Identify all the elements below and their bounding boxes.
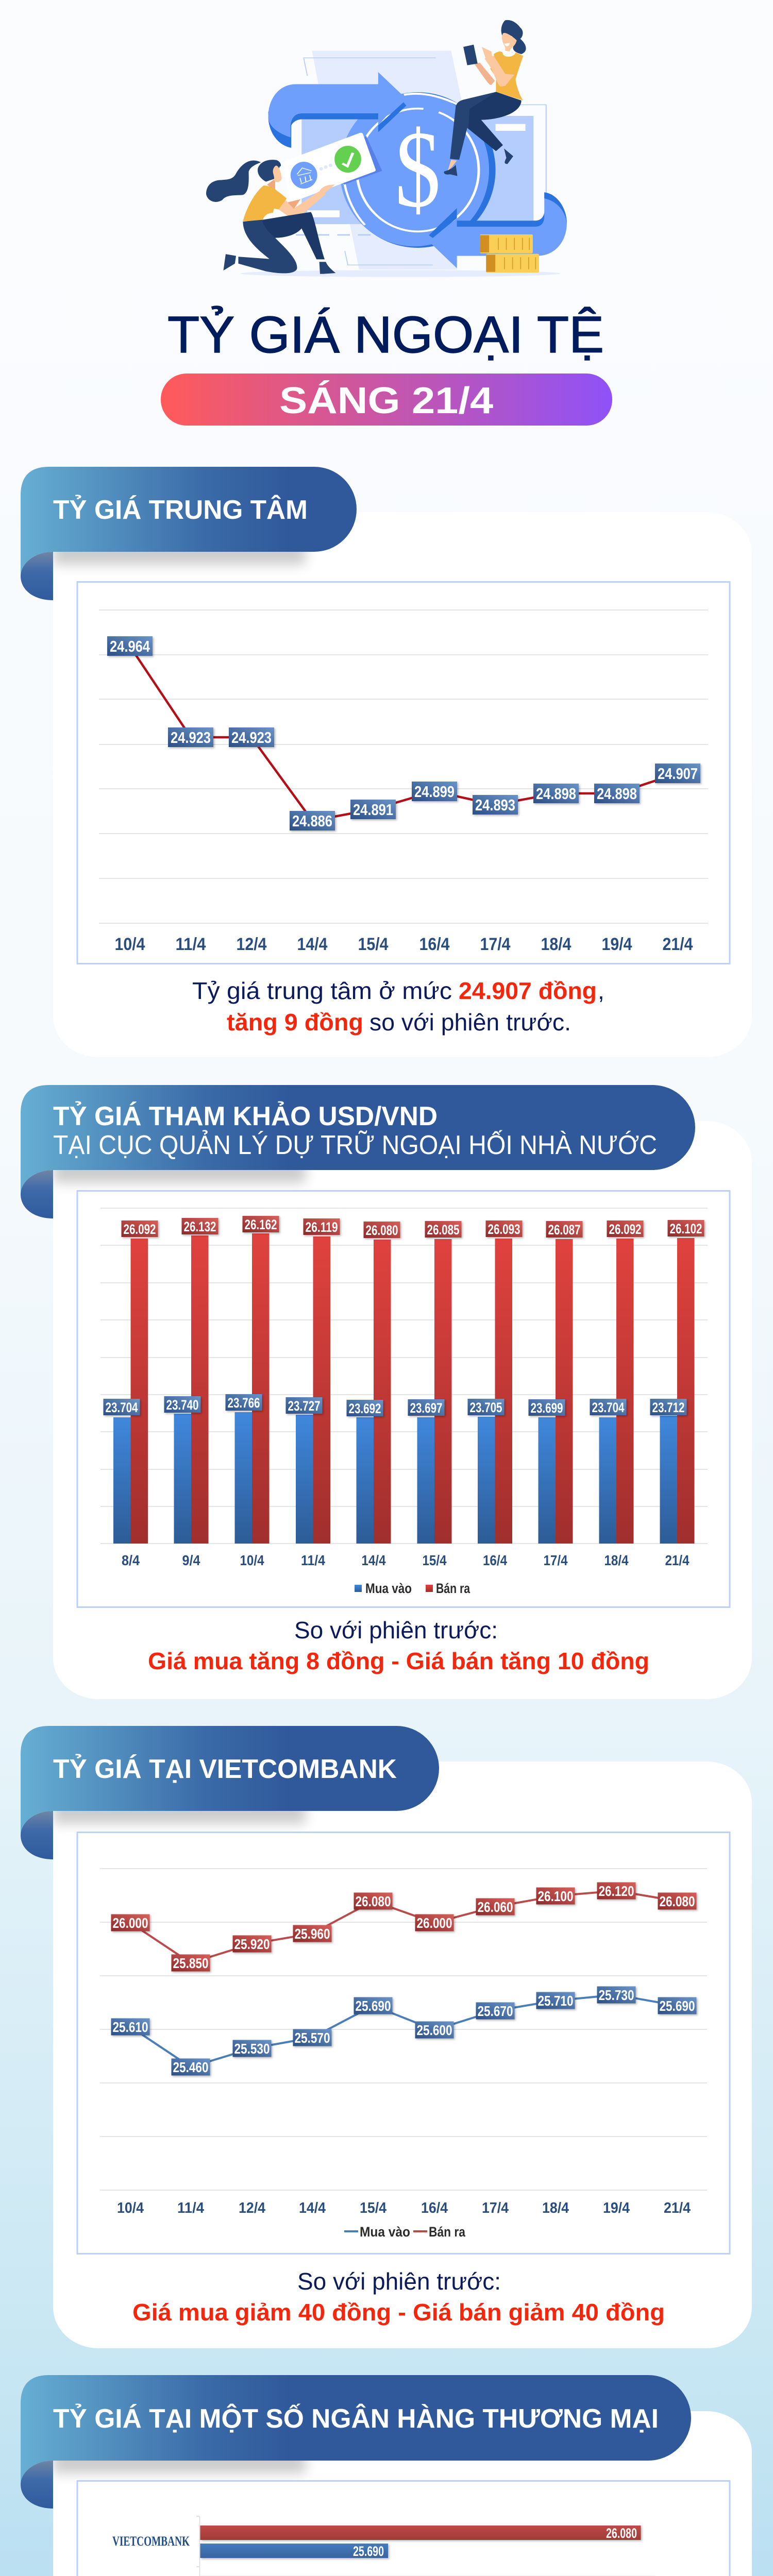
- bar chart: reference rate: 26.093: [488, 1222, 520, 1237]
- line chart: central rate: 11/4: [175, 935, 206, 954]
- caption: Vietcombank: So với phiên trước:: [297, 2268, 501, 2295]
- bar chart: reference rate: 15/4: [423, 1552, 447, 1568]
- bar chart: reference rate: 26.092: [124, 1222, 156, 1237]
- line chart: Vietcombank: 25.610: [112, 2019, 148, 2035]
- line chart: Vietcombank: 26.080: [660, 1893, 695, 1909]
- caption: central rate: Tỷ giá trung tâm ở mức: [192, 977, 452, 1004]
- bar chart: reference rate: 16/4: [483, 1552, 507, 1568]
- line chart: Vietcombank: 25.710: [538, 1993, 573, 2009]
- caption: reference rate: [148, 1617, 649, 1674]
- line chart: Vietcombank: 11/4: [177, 2200, 204, 2216]
- caption: central rate: ,: [598, 977, 604, 1004]
- line chart: central rate: 24.891: [353, 801, 393, 819]
- bar chart: reference rate: 26.102: [670, 1221, 702, 1236]
- line chart: Vietcombank: 21/4: [664, 2200, 691, 2216]
- line chart: Vietcombank: 18/4: [542, 2200, 569, 2216]
- line chart: central rate: 24.923: [231, 728, 272, 747]
- line chart: Vietcombank: 25.730: [599, 1987, 634, 2003]
- line chart: Vietcombank: 10/4: [117, 2200, 144, 2216]
- line chart: central rate: 19/4: [602, 935, 632, 954]
- bar chart: reference rate: 26.092: [609, 1222, 641, 1237]
- legend: Vietcombank: Mua vào: [360, 2224, 410, 2240]
- line chart: Vietcombank: 19/4: [603, 2200, 630, 2216]
- bar chart: reference rate: 26.162: [244, 1217, 277, 1232]
- title: TỶ GIÁ NGOẠI TỆ: [167, 306, 604, 364]
- line chart: Vietcombank: 25.850: [173, 1955, 208, 1971]
- legend: Vietcombank: [344, 2224, 466, 2240]
- line chart: Vietcombank: 25.570: [295, 2030, 330, 2046]
- line chart: Vietcombank: 15/4: [360, 2200, 386, 2216]
- heading: reference rate: [53, 1101, 657, 1160]
- bar chart: reference rate: 23.727: [288, 1398, 321, 1414]
- line chart: central rate: 24.907: [658, 765, 698, 783]
- line chart: Vietcombank: 26.060: [477, 1899, 513, 1915]
- line chart: Vietcombank: 25.460: [173, 2059, 208, 2075]
- bar chart: reference rate: 23.697: [410, 1400, 442, 1416]
- bar chart: reference rate: 23.740: [166, 1397, 199, 1413]
- bar chart: reference rate: 26.080: [366, 1223, 398, 1238]
- bar chart: reference rate: 17/4: [543, 1552, 568, 1568]
- date pill: SÁNG 21/4: [279, 380, 493, 421]
- heading: reference rate: TỶ GIÁ THAM KHẢO USD/VND: [53, 1101, 438, 1131]
- line chart: Vietcombank: 26.100: [538, 1888, 573, 1904]
- line chart: Vietcombank: 17/4: [482, 2200, 509, 2216]
- hero illustration: $: [395, 109, 441, 230]
- heading: Vietcombank: TỶ GIÁ TẠI VIETCOMBANK: [53, 1754, 397, 1784]
- date pill: [161, 374, 612, 426]
- line chart: Vietcombank: 26.000: [112, 1915, 148, 1931]
- panel: USD/VND reference rate: [21, 1085, 752, 1699]
- bar chart: reference rate: 11/4: [301, 1552, 325, 1568]
- line chart: central rate: 24.893: [475, 796, 515, 814]
- line chart: central rate: 14/4: [297, 935, 328, 954]
- caption: central rate: [192, 977, 604, 1036]
- line chart: central rate: 12/4: [236, 935, 267, 954]
- line chart: Vietcombank: 26.000: [416, 1915, 452, 1931]
- line chart: Vietcombank: 16/4: [421, 2200, 448, 2216]
- bar chart: reference rate: 18/4: [604, 1552, 629, 1568]
- line chart: Vietcombank: 14/4: [299, 2200, 326, 2216]
- bar chart: reference rate: 26.119: [305, 1219, 338, 1235]
- legend: reference rate: [355, 1581, 470, 1596]
- line chart: Vietcombank: 25.670: [477, 2003, 513, 2019]
- legend: reference rate: Mua vào: [365, 1581, 412, 1596]
- panel: central rate: [21, 467, 752, 1057]
- bar chart: reference rate: 23.712: [652, 1400, 684, 1415]
- line chart: Vietcombank: 25.960: [295, 1926, 330, 1942]
- caption: Vietcombank: [132, 2268, 665, 2326]
- line chart: Vietcombank: 12/4: [239, 2200, 265, 2216]
- bar chart: reference rate: 23.699: [531, 1400, 563, 1416]
- line chart: central rate: [77, 582, 730, 963]
- bar chart: reference rate: 8/4: [122, 1552, 140, 1568]
- line chart: central rate: 15/4: [358, 935, 389, 954]
- line chart: central rate: 18/4: [541, 935, 572, 954]
- bar chart: reference rate: 23.705: [470, 1400, 502, 1415]
- line chart: central rate: 21/4: [663, 935, 693, 954]
- heading: central rate: TỶ GIÁ TRUNG TÂM: [53, 495, 308, 525]
- horizontal bar chart: commercial banks: [77, 2481, 730, 2576]
- bar chart: reference rate: [77, 1191, 730, 1607]
- horizontal bar chart: commercial banks: 26.080: [606, 2526, 637, 2541]
- line chart: Vietcombank: 26.120: [599, 1883, 634, 1899]
- line chart: central rate: 17/4: [480, 935, 511, 954]
- line chart: Vietcombank: 25.920: [234, 1936, 270, 1952]
- line chart: Vietcombank: 25.530: [234, 2041, 270, 2057]
- caption: central rate: so với phiên trước.: [369, 1009, 571, 1036]
- line chart: central rate: 16/4: [419, 935, 450, 954]
- line chart: central rate: 24.964: [110, 637, 150, 655]
- legend: Vietcombank: Bán ra: [429, 2224, 466, 2240]
- line chart: central rate: 10/4: [114, 935, 145, 954]
- caption: reference rate: Giá mua tăng 8 đồng - Giá bán tăng 10 đồng: [148, 1648, 649, 1674]
- bar chart: reference rate: 26.085: [427, 1222, 460, 1238]
- bar chart: reference rate: 21/4: [665, 1552, 690, 1568]
- horizontal bar chart: commercial banks: VIETCOMBANK: [112, 2534, 190, 2549]
- line chart: Vietcombank: 26.080: [356, 1893, 391, 1909]
- bar chart: reference rate: 26.087: [548, 1222, 580, 1238]
- line chart: central rate: 24.923: [171, 728, 211, 747]
- bar chart: reference rate: 14/4: [362, 1552, 386, 1568]
- caption: Vietcombank: Giá mua giảm 40 đồng - Giá bán giảm 40 đồng: [132, 2299, 665, 2326]
- line chart: central rate: 24.899: [414, 783, 455, 801]
- bar chart: reference rate: 23.704: [105, 1400, 138, 1415]
- bar chart: reference rate: 23.704: [592, 1400, 625, 1415]
- line chart: Vietcombank: 25.690: [356, 1998, 391, 2014]
- line chart: central rate: 24.898: [597, 785, 637, 803]
- bar chart: reference rate: 23.692: [348, 1401, 381, 1416]
- line chart: Vietcombank: 25.690: [660, 1998, 695, 2014]
- line chart: central rate: 24.898: [536, 785, 576, 803]
- heading: commercial banks: TỶ GIÁ TẠI MỘT SỐ NGÂN HÀNG THƯƠNG MẠI: [53, 2403, 659, 2434]
- caption: reference rate: So với phiên trước:: [294, 1617, 498, 1643]
- panel: Vietcombank: [21, 1726, 752, 2348]
- bar chart: reference rate: 10/4: [240, 1552, 264, 1568]
- bar chart: reference rate: 23.766: [228, 1395, 260, 1411]
- bar chart: reference rate: 26.132: [183, 1219, 216, 1234]
- heading: reference rate: TẠI CỤC QUẢN LÝ DỰ TRỮ NGOẠI HỐI NHÀ NƯỚC: [53, 1130, 657, 1160]
- caption: central rate: 24.907 đồng: [459, 977, 597, 1004]
- line chart: Vietcombank: [77, 1832, 730, 2253]
- panel: commercial banks: [21, 2375, 752, 2576]
- line chart: central rate: 24.886: [292, 812, 332, 830]
- legend: reference rate: Bán ra: [436, 1581, 470, 1596]
- line chart: Vietcombank: 25.600: [416, 2022, 452, 2038]
- hero illustration: [206, 20, 567, 277]
- caption: central rate: tăng 9 đồng: [227, 1009, 363, 1036]
- bar chart: reference rate: 9/4: [182, 1552, 200, 1568]
- horizontal bar chart: commercial banks: 25.690: [353, 2544, 384, 2559]
